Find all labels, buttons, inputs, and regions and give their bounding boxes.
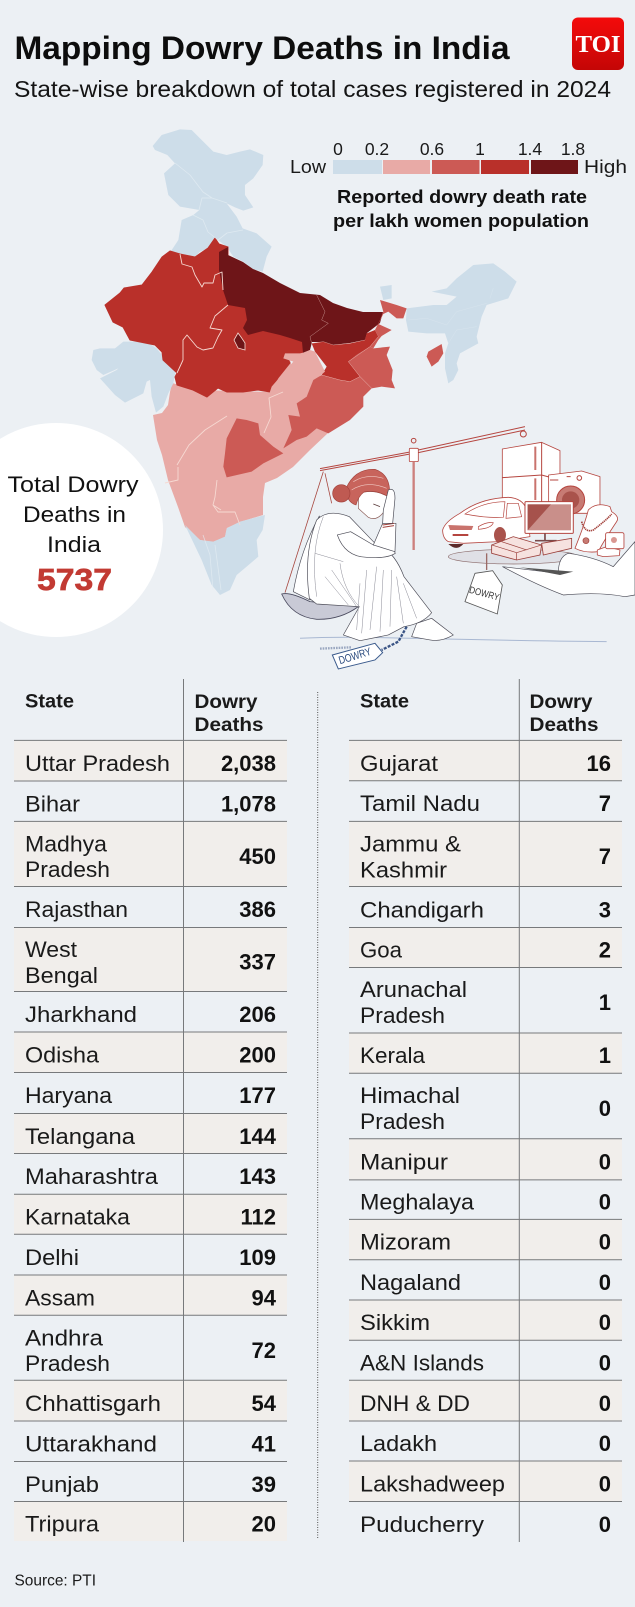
death counts right: 16 bbox=[587, 751, 611, 776]
state names left: Rajasthan bbox=[25, 897, 128, 922]
map: West Bengal south bbox=[348, 347, 395, 388]
legend: caption bbox=[333, 187, 589, 231]
grid lines right bbox=[349, 679, 622, 1542]
table: right column bbox=[349, 679, 622, 1542]
state names left: Assam bbox=[25, 1286, 95, 1310]
left scale pan bbox=[282, 594, 358, 619]
title: Mapping Dowry Deaths in India bbox=[14, 30, 510, 66]
state names right: A&N Islands bbox=[360, 1350, 484, 1376]
legend: scale values: 1.8 bbox=[561, 139, 585, 159]
death counts left: 200 bbox=[239, 1042, 276, 1068]
illustration: dowry scale with woman and goods bbox=[282, 427, 635, 669]
alternating row bands left bbox=[14, 740, 287, 1541]
table header left: Dowry bbox=[194, 691, 258, 713]
legend: scale values: 1 bbox=[475, 139, 485, 159]
map: Gujarat bbox=[92, 342, 177, 413]
death counts left: 337 bbox=[239, 950, 276, 974]
state names left: Uttarakhand bbox=[25, 1432, 157, 1456]
state names left: Karnataka bbox=[25, 1204, 131, 1230]
state names right: Puducherry bbox=[360, 1512, 484, 1537]
state names left: Odisha bbox=[25, 1042, 100, 1068]
state names right: Goa bbox=[360, 938, 403, 962]
map: north-east states bbox=[406, 263, 517, 383]
death counts right: 0 bbox=[599, 1190, 611, 1214]
legend: caption: Reported dowry death rate bbox=[337, 187, 587, 207]
alternating row bands right bbox=[349, 740, 622, 1502]
pan strings bbox=[285, 472, 332, 593]
dotted column divider bbox=[317, 692, 319, 1538]
state names left: Maharashtra bbox=[25, 1164, 159, 1189]
death counts right: 3 bbox=[599, 898, 611, 922]
death counts right: 1 bbox=[599, 1043, 611, 1068]
state names left: Madhya bbox=[25, 832, 108, 857]
tag: dowry on tray bbox=[465, 553, 502, 614]
callout: total dowry deaths: 5737 bbox=[37, 562, 112, 597]
death counts left: 177 bbox=[239, 1083, 276, 1108]
death counts left: 143 bbox=[239, 1164, 276, 1189]
death counts right: 0 bbox=[599, 1512, 611, 1537]
death counts left: 39 bbox=[252, 1472, 276, 1497]
chain bbox=[382, 627, 407, 650]
state names left: West bbox=[25, 937, 77, 962]
death counts left: 112 bbox=[240, 1204, 276, 1230]
map of India bbox=[92, 129, 517, 595]
legend: scale values: 0 bbox=[333, 139, 343, 159]
state names right: Kashmir bbox=[360, 858, 447, 882]
map: Rajasthan, Haryana and Madhya Pradesh bbox=[105, 238, 303, 397]
table header left: State bbox=[25, 690, 74, 712]
death counts left: 2,038 bbox=[221, 751, 276, 776]
woman: pallu bbox=[293, 516, 323, 600]
death counts left: 54 bbox=[252, 1391, 277, 1416]
tag: dowry on chain: DOWRY bbox=[337, 646, 373, 667]
state names left: Uttar Pradesh bbox=[25, 751, 170, 776]
state names left: Pradesh bbox=[25, 857, 110, 882]
state names right: Sikkim bbox=[360, 1310, 430, 1335]
death counts left: 20 bbox=[252, 1512, 276, 1536]
scale post bbox=[410, 462, 417, 550]
table header right: Dowry bbox=[530, 691, 593, 713]
woman: hand bbox=[383, 489, 395, 523]
state names left: Telangana bbox=[25, 1124, 136, 1149]
state names right: Chandigarh bbox=[360, 898, 484, 922]
table: left column bbox=[14, 679, 287, 1542]
death counts right: 7 bbox=[599, 844, 611, 869]
callout: total dowry deaths: Deaths in bbox=[23, 502, 126, 527]
death counts left: 72 bbox=[252, 1338, 276, 1363]
state names left: Punjab bbox=[25, 1472, 99, 1497]
scale beam bbox=[320, 427, 526, 471]
state names right: Manipur bbox=[360, 1150, 448, 1174]
legend: scale values: 0.2 bbox=[365, 139, 389, 159]
fridge bbox=[502, 442, 560, 507]
state names right: Tamil Nadu bbox=[360, 791, 480, 816]
map: Jharkhand bbox=[312, 330, 378, 382]
legend: colour bar bbox=[333, 160, 578, 174]
state names left: Bihar bbox=[25, 792, 80, 816]
tag: dowry on tray: DOWRY bbox=[468, 585, 501, 604]
state names right: Jammu & bbox=[360, 832, 461, 857]
legend: high label: High bbox=[584, 157, 627, 177]
death counts left: 144 bbox=[239, 1124, 277, 1149]
state names left: Jharkhand bbox=[25, 1002, 137, 1027]
legend bbox=[290, 139, 627, 231]
map: northern blue states bbox=[153, 129, 272, 272]
death counts left: 41 bbox=[252, 1432, 276, 1456]
map: Sikkim bbox=[380, 285, 392, 300]
map: eastern state borders bbox=[310, 288, 493, 388]
tray bbox=[448, 549, 578, 564]
state names right: Himachal bbox=[360, 1083, 460, 1108]
death counts left bbox=[221, 751, 277, 1536]
monitor bbox=[525, 502, 573, 541]
logo: TOI bbox=[572, 18, 624, 70]
legend: scale values: 0.6 bbox=[420, 139, 444, 159]
subtitle: State-wise breakdown of total cases registered in 2024 bbox=[14, 76, 611, 102]
legend: scale values bbox=[333, 139, 585, 159]
death counts right: 1 bbox=[599, 990, 611, 1015]
callout: total dowry deaths: Total Dowry bbox=[8, 472, 139, 497]
table header left: Deaths bbox=[194, 714, 264, 736]
state names right: DNH & DD bbox=[360, 1391, 470, 1416]
legend: low label: Low bbox=[290, 157, 327, 177]
map: Tripura bbox=[427, 344, 443, 367]
state names left: Tripura bbox=[25, 1512, 100, 1536]
table header right bbox=[360, 690, 599, 736]
woman: feet bbox=[412, 618, 453, 640]
map: UP enclave bbox=[234, 333, 245, 350]
ring box bbox=[597, 533, 624, 557]
death counts right: 0 bbox=[599, 1270, 611, 1295]
state names left: Andhra bbox=[25, 1326, 104, 1350]
state names right: Kerala bbox=[360, 1043, 426, 1068]
woman bbox=[293, 469, 453, 641]
woman: bangles bbox=[383, 523, 394, 527]
map: peninsular pink states bbox=[153, 353, 340, 542]
state names right: Meghalaya bbox=[360, 1190, 475, 1214]
woman: face bbox=[358, 492, 389, 519]
car bbox=[443, 497, 530, 548]
state names right: Gujarat bbox=[360, 751, 438, 776]
death counts left: 386 bbox=[239, 897, 276, 922]
death counts right: 7 bbox=[599, 791, 611, 816]
table header left bbox=[25, 690, 264, 736]
state names right: Ladakh bbox=[360, 1431, 437, 1456]
jewellery bust bbox=[575, 505, 618, 552]
state names right: Lakshadweep bbox=[360, 1472, 505, 1496]
woman: hair bbox=[346, 469, 390, 505]
death counts right: 2 bbox=[599, 938, 611, 962]
woman: sari bbox=[307, 513, 432, 641]
state names right: Pradesh bbox=[360, 1003, 445, 1028]
death counts right: 0 bbox=[599, 1150, 611, 1174]
death counts left: 1,078 bbox=[221, 792, 276, 816]
state names left: Delhi bbox=[25, 1245, 79, 1270]
death counts right: 0 bbox=[599, 1431, 611, 1456]
map: state borders, west and south bbox=[165, 163, 283, 590]
state names left bbox=[25, 751, 170, 1536]
death counts right: 0 bbox=[599, 1350, 611, 1376]
death counts left: 109 bbox=[239, 1245, 276, 1270]
state names left: Bengal bbox=[25, 963, 98, 988]
death counts left: 94 bbox=[252, 1286, 277, 1310]
state names left: Pradesh bbox=[25, 1351, 110, 1376]
legend: scale values: 1.4 bbox=[518, 139, 542, 159]
grid lines left bbox=[14, 679, 287, 1542]
death counts right: 0 bbox=[599, 1472, 611, 1496]
state names left: Chhattisgarh bbox=[25, 1391, 161, 1416]
map: Odisha bbox=[283, 375, 372, 448]
callout: total dowry deaths bbox=[0, 423, 163, 637]
death counts right: 0 bbox=[599, 1391, 611, 1416]
map: Uttar Pradesh and Bihar bbox=[219, 247, 383, 353]
washing machine bbox=[549, 471, 600, 514]
map: southern blue states bbox=[185, 515, 265, 595]
logo: TOI: TOI bbox=[576, 32, 620, 58]
hand bbox=[503, 542, 635, 597]
state names right: Pradesh bbox=[360, 1109, 445, 1134]
death counts right bbox=[587, 751, 611, 1537]
woman: arm bbox=[337, 532, 395, 558]
state names right: Mizoram bbox=[360, 1230, 451, 1254]
table header right: Deaths bbox=[530, 714, 599, 736]
callout: total dowry deaths: India bbox=[47, 532, 102, 557]
state names right: Nagaland bbox=[360, 1270, 461, 1295]
state names right bbox=[360, 751, 505, 1537]
death counts left: 206 bbox=[239, 1002, 276, 1027]
map: Chhattisgarh bbox=[268, 350, 325, 448]
death counts left: 450 bbox=[239, 844, 276, 869]
map: Telangana bbox=[223, 418, 283, 477]
death counts right: 0 bbox=[599, 1310, 611, 1335]
table header right: State bbox=[360, 690, 409, 712]
cash stacks bbox=[492, 537, 572, 560]
death counts right: 0 bbox=[599, 1096, 611, 1121]
ground line bbox=[300, 637, 607, 642]
state names left: Haryana bbox=[25, 1083, 113, 1108]
legend: caption: per lakh women population bbox=[333, 211, 589, 231]
death counts right: 0 bbox=[599, 1230, 611, 1254]
state names right: Arunachal bbox=[360, 977, 467, 1002]
map: West Bengal north bbox=[370, 300, 407, 348]
source note: Source: PTI bbox=[14, 1572, 96, 1590]
